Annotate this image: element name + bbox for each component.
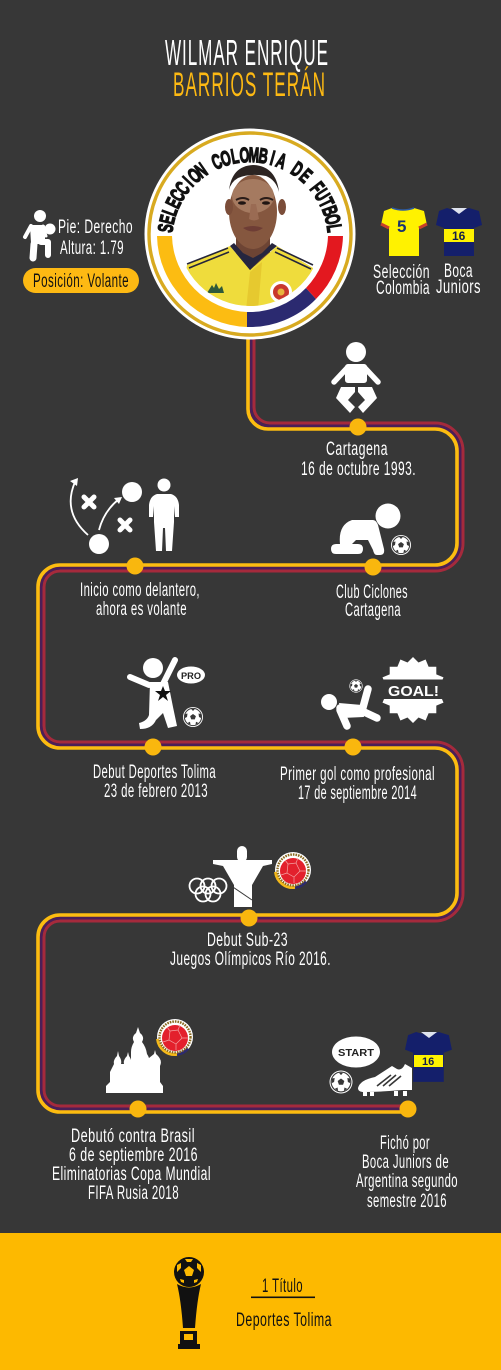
text: Club Ciclones: Cartagena (345, 600, 401, 621)
badge arc text: O (239, 142, 250, 167)
text: birth: Cartagena (326, 439, 388, 460)
title (165, 32, 329, 104)
text: titles (236, 1276, 332, 1331)
badge arc text (153, 142, 347, 234)
badge arc text: C (208, 148, 226, 174)
text: Debut Deportes Tolima (93, 762, 216, 802)
icon: pro player: PRO (181, 671, 201, 682)
text: Sub-23: Juegos Olímpicos Río 2016. (170, 949, 331, 970)
badge arc text: M (248, 142, 260, 167)
foot and height text (58, 217, 133, 259)
foot and height text: Pie: Derecho (58, 217, 133, 238)
team labels: Selección (373, 262, 430, 283)
panel: teams (373, 208, 482, 299)
badge arc text: B (317, 202, 343, 219)
icon: Colombia jersey: 5 (397, 217, 406, 236)
text: Club Ciclones (336, 582, 408, 621)
panel: physical data (23, 210, 139, 293)
text: Debut Deportes Tolima: 23 de febrero 2013 (104, 781, 208, 802)
badge arc text: U (310, 185, 335, 205)
badge ring: yellow (157, 236, 247, 327)
badge arc text: E (295, 164, 317, 188)
title: BARRIOS TERÁN (173, 66, 326, 104)
icon: player kicking ball (25, 210, 56, 258)
badge arc text: I (268, 146, 278, 170)
badge arc text: I (178, 172, 198, 191)
text: titles: Deportes Tolima (236, 1310, 332, 1331)
text: Brasil debut: FIFA Rusia 2018 (88, 1183, 179, 1204)
icon: Saint Basil cathedral and badge (106, 1019, 193, 1093)
icon: Rio statue, olympic rings and badge (190, 846, 311, 907)
text: delantero: Inicio como delantero, (80, 580, 200, 601)
badge arc text: E (154, 213, 180, 227)
badge arc text: O (217, 145, 234, 171)
text: Club Ciclones: Club Ciclones (336, 582, 408, 603)
icon: baby (334, 342, 378, 413)
badge arc text: O (320, 212, 346, 227)
badge arc text: C (165, 185, 190, 206)
badge arc text: L (322, 223, 347, 234)
text: Sub-23: Debut Sub-23 (207, 930, 288, 951)
badge arc text: F (305, 177, 329, 198)
position pill: Posición: Volante (33, 271, 129, 292)
badge arc text: D (287, 156, 308, 182)
text: Boca signing (356, 1133, 458, 1212)
icon: crawling baby with ball (331, 504, 411, 555)
team labels: Colombia (376, 278, 430, 299)
text: birth (301, 439, 416, 480)
text: Boca signing: Fichó por (380, 1133, 430, 1154)
team labels: Juniors (436, 277, 481, 298)
icon: start, boot and Boca jersey: START (338, 1047, 375, 1059)
badge ring: red (306, 236, 343, 299)
badge arc text: S (153, 222, 178, 234)
foot and height text: Altura: 1.79 (60, 238, 124, 259)
icon: start, boot and Boca jersey: 16 (422, 1056, 434, 1068)
text: Brasil debut: Debutó contra Brasil (71, 1126, 195, 1147)
icon: trophy (174, 1257, 204, 1349)
text: titles: 1 Título (262, 1276, 303, 1297)
text: Brasil debut (52, 1126, 211, 1204)
text: Brasil debut: 6 de septiembre 2016 (69, 1145, 198, 1166)
badge arc text: A (273, 148, 291, 174)
panel: titles footer (0, 1233, 501, 1370)
text: delantero: ahora es volante (96, 599, 187, 620)
icon: bicycle kick and goal burst (321, 657, 448, 726)
timeline path (38, 335, 463, 1112)
icon: pro player (130, 658, 205, 729)
icon: Boca jersey: 16 (452, 229, 466, 243)
text: Sub-23 (170, 930, 331, 970)
player photo (186, 165, 314, 306)
text: WILMAR ENRIQUE (165, 32, 329, 73)
badge arc text: N (190, 158, 212, 183)
text: first goal: 17 de septiembre 2014 (298, 783, 417, 804)
text: Boca signing: semestre 2016 (367, 1191, 447, 1212)
badge arc text: L (229, 143, 241, 169)
text: Brasil debut: Eliminatorias Copa Mundial (52, 1164, 211, 1185)
text: Debut Deportes Tolima: Debut Deportes Tolima (93, 762, 216, 783)
badge arc text: L (157, 203, 183, 219)
badge arc text: O (183, 163, 206, 188)
icon: bicycle kick and goal burst: GOAL! (388, 683, 439, 700)
badge arc text: E (160, 194, 186, 212)
text: delantero (80, 580, 200, 620)
timeline dots (126, 418, 416, 1118)
badge arc text: B (257, 143, 270, 168)
team labels: Boca (444, 261, 473, 282)
icon: start, boot and Boca jersey (330, 1032, 452, 1096)
badge arc text: T (314, 194, 339, 212)
panel: player badge (144, 128, 356, 340)
icon: tactics and player (70, 478, 179, 554)
badge ring: blue (247, 288, 316, 327)
badge arc text: C (170, 177, 195, 199)
text: first goal (280, 764, 435, 804)
text: birth: 16 de octubre 1993. (301, 459, 416, 480)
team labels (373, 261, 481, 299)
